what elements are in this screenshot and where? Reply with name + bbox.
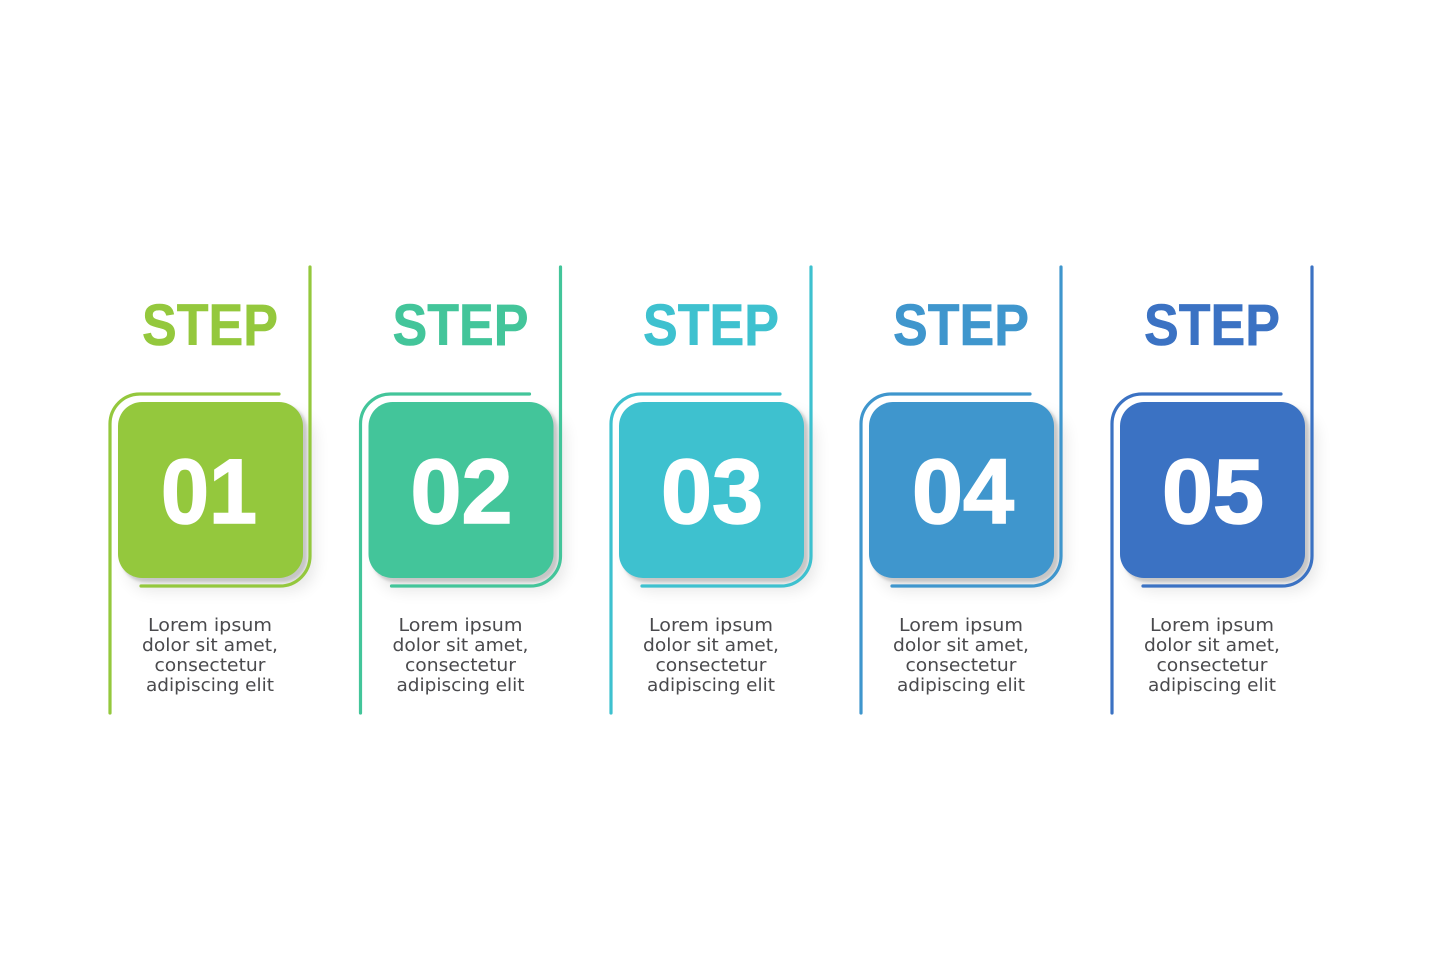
number: step 5: 05 [1162,441,1264,543]
description: step 5 [1144,615,1280,696]
description: step 5: Lorem ipsum [1150,615,1274,636]
number: step 1: 01 [161,441,257,543]
card shadow: step 4 [872,405,1065,590]
description: step 4: consectetur [906,655,1017,676]
left and top outline: step 4 [861,394,1030,713]
number card: step 4 [869,402,1054,578]
description: step 2: Lorem ipsum [398,615,522,636]
number card: step 2 [368,402,554,578]
number: step 3: 03 [661,441,763,543]
number: step 4: 04 [912,441,1014,543]
heading: step 2: STEP [392,293,528,358]
number card: step 5 [1120,402,1305,578]
right and bottom outline: step 3 [642,267,811,586]
card shadow: step 2 [372,405,564,590]
description: step 5: adipiscing elit [1148,675,1276,696]
description: step 5: dolor sit amet, [1144,635,1280,656]
description: step 1: Lorem ipsum [148,615,272,636]
number card: step 3 [619,402,804,578]
step 1 [110,267,314,713]
description: step 1: consectetur [154,655,266,676]
card shadow: step 1 [121,405,314,590]
description: step 4: Lorem ipsum [899,615,1023,636]
number: step 2: 02 [410,441,512,543]
right and bottom outline: step 2 [392,267,560,586]
card shadow: step 5 [1123,405,1316,590]
description: step 2: adipiscing elit [396,675,524,696]
description: step 4: adipiscing elit [897,675,1025,696]
right and bottom outline: step 4 [892,267,1061,586]
heading: step 5: STEP [1144,293,1280,358]
description: step 4: dolor sit amet, [893,635,1029,656]
description: step 1 [142,615,278,696]
description: step 2 [392,615,528,696]
description: step 3: dolor sit amet, [643,635,779,656]
description: step 5: consectetur [1156,655,1268,676]
heading: step 1: STEP [142,293,278,358]
description: step 3: consectetur [656,655,767,676]
description: step 3: Lorem ipsum [649,615,773,636]
step 2 [360,267,564,713]
number card: step 1 [118,402,303,578]
card shadow: step 3 [622,405,815,590]
right and bottom outline: step 5 [1143,267,1312,586]
left and top outline: step 1 [110,394,279,713]
description: step 2: consectetur [405,655,517,676]
heading: step 4: STEP [893,293,1029,358]
left and top outline: step 3 [611,394,780,713]
heading: step 3: STEP [643,293,779,358]
description: step 1: adipiscing elit [146,675,274,696]
step 4 [861,267,1065,713]
description: step 3 [643,615,779,696]
description: step 2: dolor sit amet, [392,635,528,656]
step 3 [611,267,815,713]
left and top outline: step 5 [1112,394,1281,713]
step 5 [1112,267,1316,713]
right and bottom outline: step 1 [141,267,310,586]
description: step 3: adipiscing elit [647,675,775,696]
description: step 4 [893,615,1029,696]
description: step 1: dolor sit amet, [142,635,278,656]
left and top outline: step 2 [360,394,530,713]
